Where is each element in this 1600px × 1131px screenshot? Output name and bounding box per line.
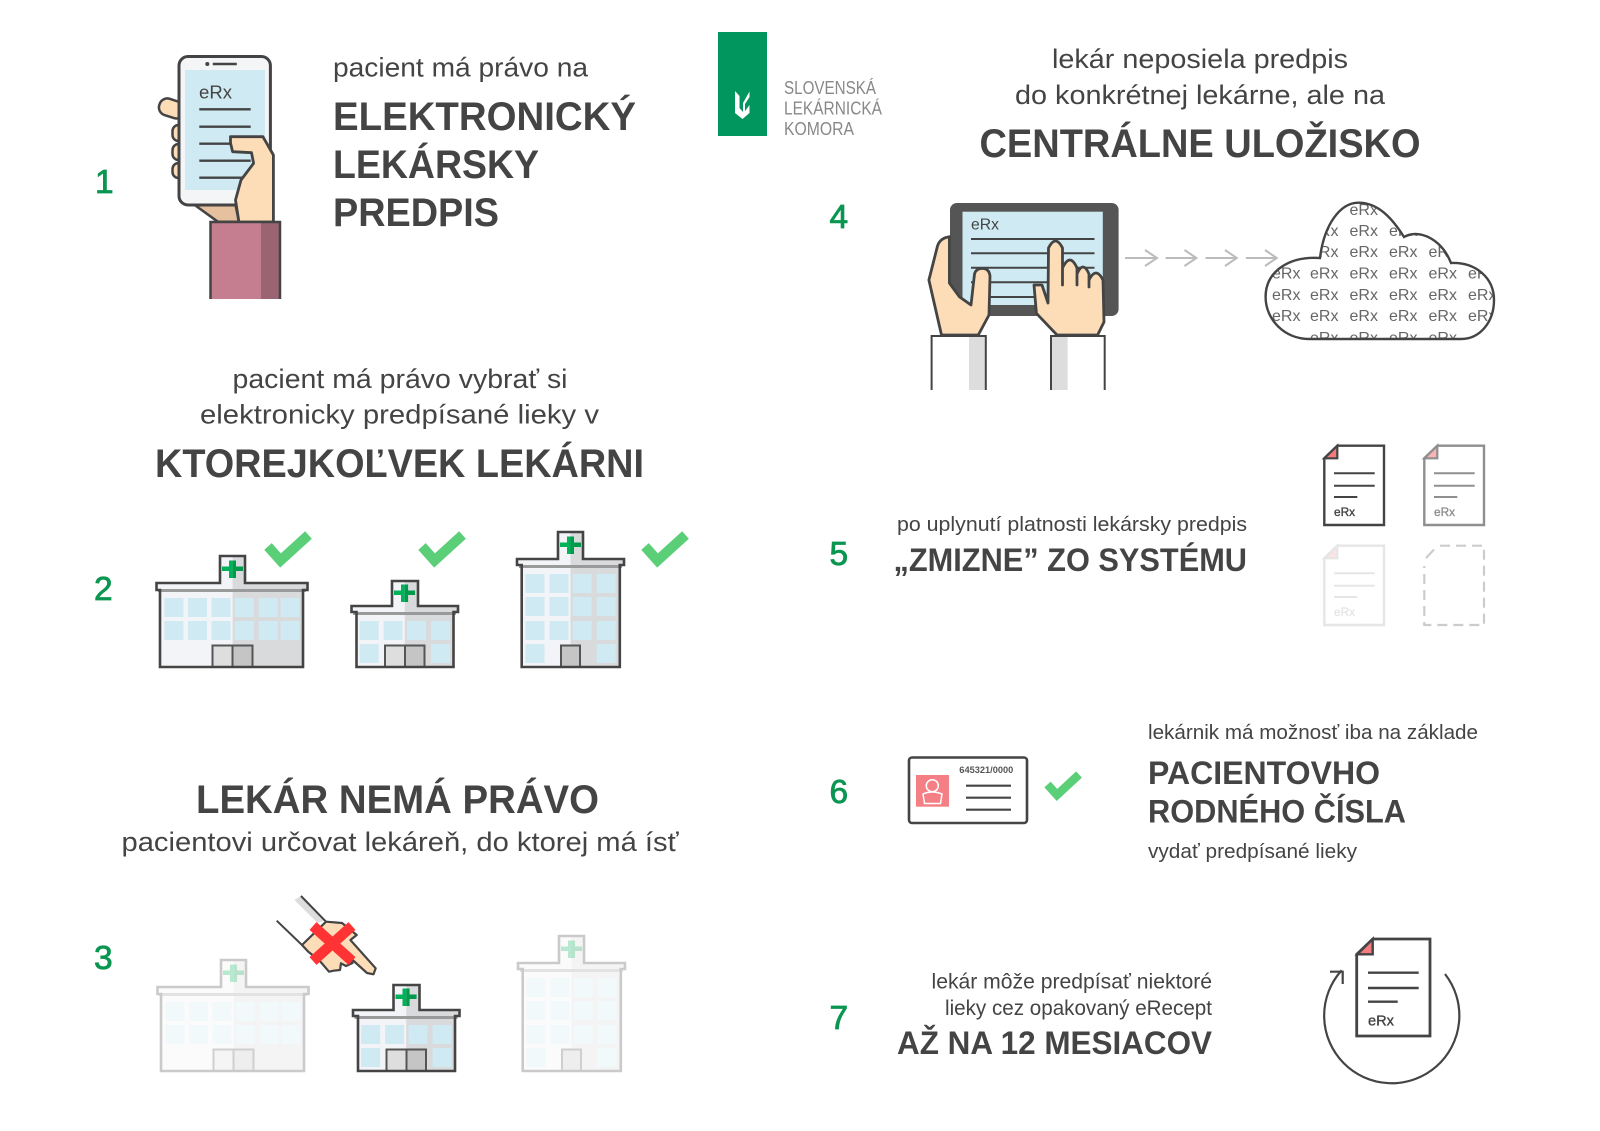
number 4: 4 [830, 199, 848, 236]
icon: cloud with eRx records: eRx [1310, 266, 1338, 282]
icon: dashed empty document [1424, 546, 1484, 625]
heading: lekár nemá právo: LEKÁR NEMÁ PRÁVO [196, 777, 599, 822]
logo: Slovenská lekárnická komora: LEKÁRNICKÁ [784, 98, 882, 118]
text: lekár neposiela predpis: lekár neposiela predpis [1052, 44, 1348, 74]
heading: elektronický lekársky predpis: PREDPIS [333, 191, 499, 235]
icon: document fading: eRx [1434, 505, 1455, 519]
icon: document fading [1424, 446, 1484, 525]
number 1: 1 [95, 164, 114, 201]
icon: cloud with eRx records: eRx [1272, 308, 1300, 325]
number 3: 3 [94, 940, 113, 977]
panel 6: rodné číslo [830, 722, 1478, 863]
icon: check 3 [645, 535, 686, 560]
heading: elektronický lekársky predpis [333, 93, 636, 235]
icon: cloud with eRx records: eRx [1428, 266, 1457, 282]
icon: cloud with eRx records: eRx [1389, 244, 1417, 261]
text: lekár neposiela predpis: do konkrétnej lekárne, ale na [1015, 80, 1386, 110]
icon: repeating prescription [1324, 939, 1459, 1083]
icon: cloud with eRx records: eRx [1350, 287, 1378, 304]
heading: elektronický lekársky predpis: ELEKTRONICKÝ [333, 93, 636, 139]
icon: cloud with eRx records: eRx [1389, 308, 1417, 325]
icon: cloud with eRx records: eRx [1468, 266, 1496, 282]
icon: pointing hand with red cross [277, 896, 376, 974]
icon: cloud with eRx records: eRx [1350, 266, 1378, 282]
icon: check [1048, 774, 1079, 795]
icon: ID card [909, 758, 1027, 823]
icon: cloud with eRx records: eRx [1428, 287, 1457, 304]
text: pacient má právo vybrať si: pacient má právo vybrať si [232, 364, 568, 394]
panel 2: výber lekárne [94, 364, 686, 667]
heading: pacientovho rodného čísla: PACIENTOVHO [1148, 755, 1380, 791]
icon: document nearly gone: eRx [1334, 605, 1355, 619]
logo: Slovenská lekárnická komora: KOMORA [784, 119, 854, 139]
icon: cloud with eRx records: eRx [1389, 287, 1417, 304]
icon: cloud with eRx records: eRx [1389, 330, 1417, 347]
icon: cloud with eRx records: eRx [1310, 244, 1338, 261]
icon: cloud with eRx records: eRx [1310, 308, 1338, 325]
icon: cloud with eRx records: eRx [1350, 223, 1378, 240]
number 5: 5 [830, 536, 848, 573]
icon: cloud with eRx records: eRx [1350, 308, 1378, 325]
icon: cloud with eRx records: eRx [1389, 223, 1417, 240]
icon: pharmacy 3 [517, 532, 624, 667]
text: vydať predpísané lieky: vydať predpísané lieky [1148, 841, 1357, 863]
icon: document solid [1324, 446, 1384, 525]
heading: elektronický lekársky predpis: LEKÁRSKY [333, 142, 539, 187]
icon: hands on tablet [929, 203, 1119, 390]
icon: hand holding phone [157, 56, 280, 299]
heading: pacientovho rodného čísla: RODNÉHO ČÍSLA [1148, 794, 1406, 830]
icon: cloud with eRx records: eRx [1468, 308, 1496, 325]
text: lekárnik má možnosť: lekárnik má možnosť iba na základe [1148, 722, 1478, 744]
panel 5: zmizne zo systému [830, 446, 1484, 625]
text: po uplynutí platnosti: po uplynutí platnosti lekársky predpis [897, 514, 1247, 536]
arrows to cloud [1125, 250, 1277, 266]
icon: repeating prescription: eRx [1368, 1013, 1394, 1030]
number 6: 6 [830, 774, 848, 811]
heading: ktorejkoľvek lekárni: KTOREJKOĽVEK LEKÁRNI [155, 441, 644, 486]
icon: cloud with eRx records: eRx [1350, 244, 1378, 261]
icon: cloud with eRx records: eRx [1310, 223, 1338, 240]
icon: cloud with eRx records: eRx [1468, 287, 1496, 304]
heading: centrálne uložisko: CENTRÁLNE ULOŽISKO [980, 120, 1420, 166]
icon: cloud with eRx records: eRx [1272, 287, 1300, 304]
icon: faded pharmacy left [158, 960, 308, 1071]
number 7: 7 [830, 1000, 848, 1037]
icon: check 1 [268, 535, 308, 560]
icon: hands on tablet: eRx [971, 216, 999, 234]
icon: hand holding phone: eRx [199, 82, 233, 102]
text: pacient má právo na: pacient má právo na [333, 52, 589, 82]
text: lekár môže predpísať [932, 970, 1212, 1020]
icon: cloud with eRx records: eRx [1350, 330, 1378, 347]
text: lekár neposiela predpis [1015, 44, 1386, 110]
logo: Slovenská lekárnická komora: SLOVENSKÁ [784, 78, 876, 98]
icon: pharmacy 2 [352, 581, 458, 667]
icon: cloud with eRx records [1266, 202, 1496, 347]
text: pacientovi určovať lekáreň: pacientovi určovat lekáreň, do ktorej má ísť [122, 827, 679, 857]
icon: faded pharmacy right [518, 936, 625, 1071]
panel 4: centrálne uložisko [830, 44, 1496, 390]
icon: cloud with eRx records: eRx [1310, 287, 1338, 304]
icon: check 2 [422, 535, 462, 560]
icon: cloud with eRx records: eRx [1428, 308, 1457, 325]
panel 7: opakovaný eRecept [830, 939, 1459, 1083]
logo: Slovenská lekárnická komora [718, 32, 882, 139]
icon: active pharmacy [353, 985, 460, 1071]
number 2: 2 [94, 571, 113, 608]
heading: zmizne zo systému: „ZMIZNE” ZO SYSTÉMU [894, 542, 1247, 578]
text: pacient má právo vybrať si: elektronicky predpísané lieky v [200, 400, 600, 430]
icon: pharmacy 1 [156, 556, 308, 667]
icon: cloud with eRx records: eRx [1272, 266, 1300, 282]
icon: cloud with eRx records: eRx [1389, 266, 1417, 282]
icon: document solid: eRx [1334, 505, 1355, 519]
text: pacient má právo vybrať si [200, 364, 600, 430]
icon: ID card: 645321/0000 [959, 765, 1013, 776]
text: lekár môže predpísať: lieky cez opakovaný eRecept [945, 997, 1212, 1020]
heading: pacientovho rodného čísla [1148, 755, 1406, 830]
panel 3: lekár nemá právo [94, 777, 679, 1071]
panel 1: elektronický lekársky predpis [95, 52, 636, 299]
heading: až na 12 mesiacov: AŽ NA 12 MESIACOV [897, 1025, 1213, 1061]
icon: cloud with eRx records: eRx [1310, 330, 1338, 347]
icon: document nearly gone [1324, 546, 1384, 625]
text: lekár môže predpísať: lekár môže predpísať niektoré [932, 970, 1212, 994]
icon: cloud with eRx records: eRx [1350, 202, 1378, 219]
icon: cloud with eRx records: eRx [1428, 244, 1457, 261]
icon: cloud with eRx records: eRx [1428, 330, 1457, 347]
